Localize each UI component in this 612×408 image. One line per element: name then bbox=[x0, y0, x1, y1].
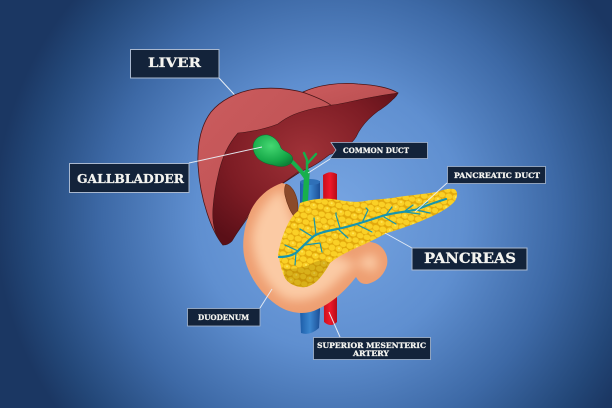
superior mesenteric artery bbox=[323, 172, 337, 325]
label: liver bbox=[130, 50, 219, 78]
label: gallbladder: GALLBLADDER bbox=[77, 171, 185, 186]
gallbladder bbox=[253, 135, 293, 166]
common duct bbox=[288, 153, 316, 204]
label: common duct: COMMON DUCT bbox=[343, 146, 409, 155]
duodenum bbox=[243, 183, 387, 313]
duodenum opening bbox=[285, 184, 298, 218]
label: liver: LIVER bbox=[148, 56, 201, 71]
label: superior mesenteric artery bbox=[314, 338, 430, 360]
label: duodenum bbox=[188, 308, 260, 326]
liver bbox=[198, 83, 398, 245]
pancreas bbox=[278, 189, 457, 287]
label: duodenum: DUODENUM bbox=[198, 313, 249, 322]
label: pancreas: PANCREAS bbox=[424, 251, 516, 267]
label: pancreas bbox=[412, 248, 527, 270]
label: superior mesenteric artery: ARTERY bbox=[352, 349, 390, 358]
pancreatic duct bbox=[279, 199, 446, 265]
leader line: liver bbox=[219, 78, 243, 104]
liver front lobe bbox=[198, 88, 345, 245]
label: pancreatic duct: PANCREATIC DUCT bbox=[454, 171, 540, 180]
leader lines to labels bbox=[189, 147, 447, 337]
liver underside bbox=[213, 93, 398, 245]
label: superior mesenteric artery: SUPERIOR MESENTERIC bbox=[317, 341, 426, 350]
label: common duct bbox=[330, 142, 428, 158]
label: gallbladder bbox=[70, 164, 189, 192]
label: pancreatic duct bbox=[448, 166, 546, 184]
liver back lobe bbox=[303, 83, 398, 112]
inferior vena cava bbox=[300, 179, 320, 334]
